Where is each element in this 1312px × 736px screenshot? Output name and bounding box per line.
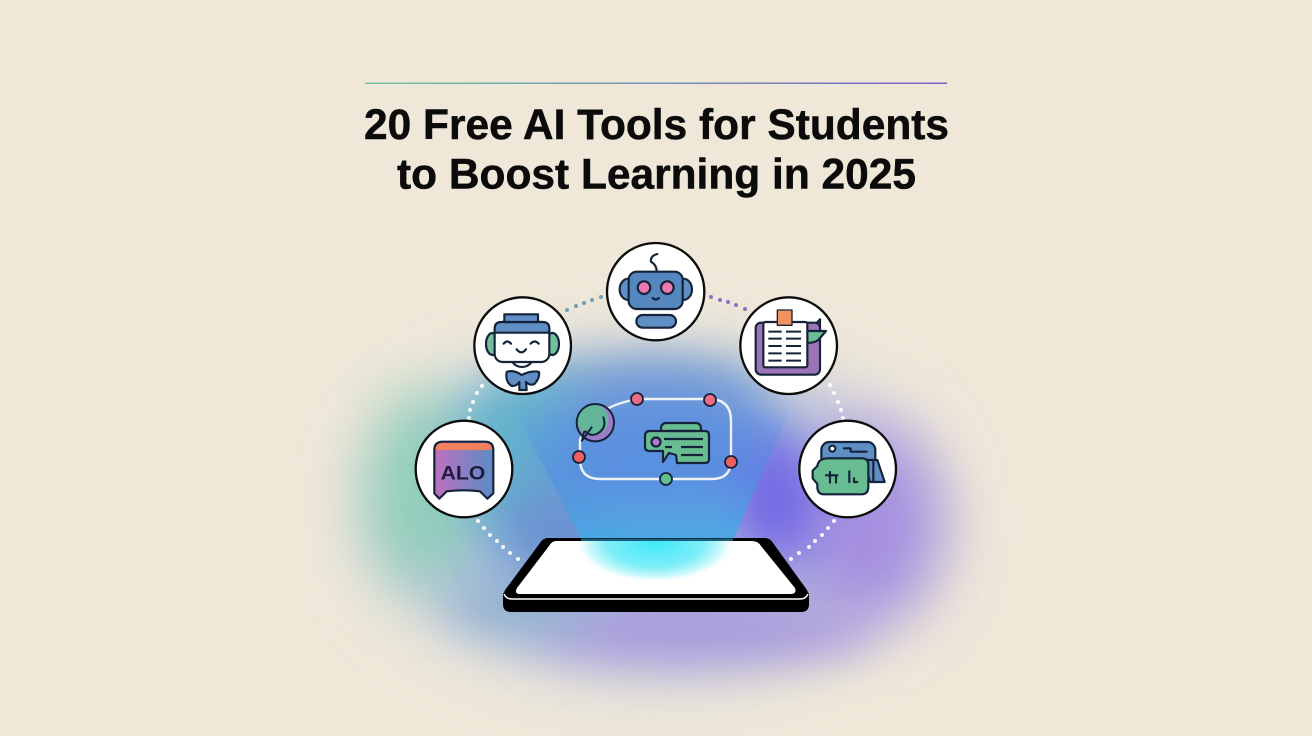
centre workflow frame (573, 393, 737, 485)
tablet screen (516, 541, 796, 594)
title: to Boost Learning in 2025 (397, 150, 916, 198)
icon circle: ALO: ALO (441, 463, 485, 484)
light beam from tablet (512, 405, 792, 540)
icon circle: translator device (799, 421, 896, 517)
frame nodes (573, 393, 737, 485)
tablet (503, 538, 809, 612)
icon circle: robot (607, 243, 704, 340)
divider rule (365, 82, 947, 84)
title: 20 Free AI Tools for Students (364, 101, 949, 149)
tablet base (503, 593, 809, 612)
icon circle: notebook (740, 297, 837, 394)
icon: refresh orb (577, 404, 614, 441)
title (364, 101, 949, 198)
icon circle: ALO (416, 421, 512, 517)
icon: chat bubbles (645, 423, 709, 463)
screen glow (580, 541, 730, 580)
dotted connector arc (467, 295, 845, 561)
icon circle: smiling assistant (474, 297, 571, 394)
tablet bezel (504, 538, 808, 599)
glow backdrop (370, 357, 940, 662)
